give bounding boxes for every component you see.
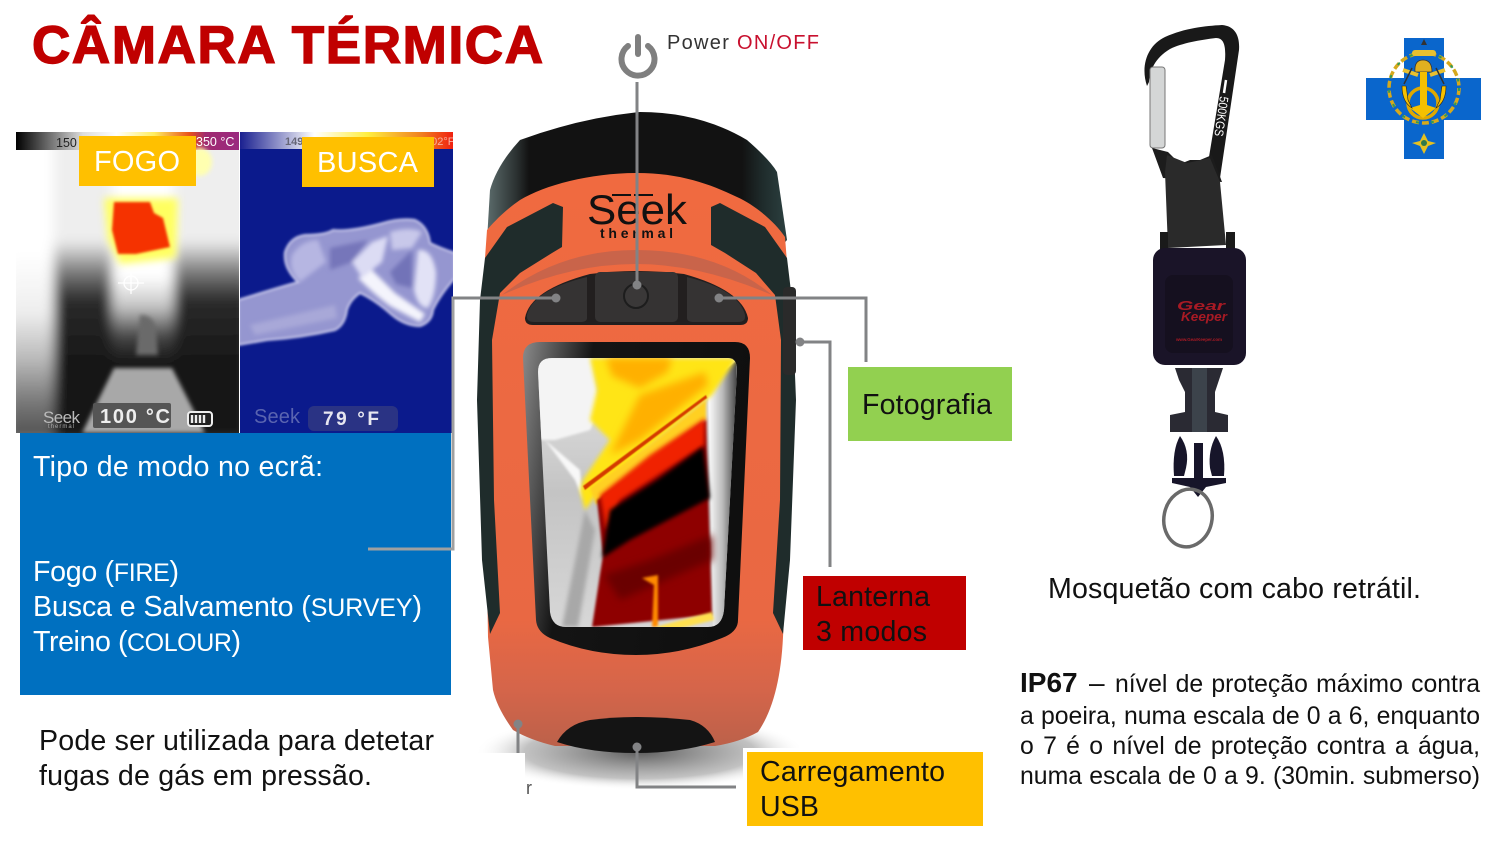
title: CÂMARA TÉRMICA bbox=[32, 14, 543, 75]
label: Carregamento USB: USB bbox=[760, 791, 819, 823]
label: Carregamento USB: Carregamento bbox=[760, 756, 945, 788]
side button bbox=[783, 287, 796, 375]
thermal image: search mode: Seek bbox=[254, 406, 301, 428]
callout line: hidden label bbox=[514, 720, 522, 756]
thermal image: fire mode: 100 °C bbox=[100, 406, 170, 428]
thermal image: search mode: 149°F bbox=[285, 136, 315, 148]
device top bbox=[487, 112, 787, 270]
callout line: power button bbox=[632, 82, 642, 290]
power label: Power ON/OFF bbox=[667, 32, 819, 54]
white mask with cropped label bbox=[463, 753, 532, 813]
thermal image: search mode bbox=[238, 132, 455, 433]
key ring bbox=[1158, 485, 1218, 551]
label: Lanterna 3 modos bbox=[803, 576, 966, 650]
label: Fotografia bbox=[848, 367, 1012, 441]
list: modes: Busca e Salvamento (SURVEY) bbox=[33, 591, 422, 623]
list: modes bbox=[33, 556, 422, 658]
list: modes: Treino (COLOUR) bbox=[33, 626, 241, 658]
label: Lanterna 3 modos: Lanterna bbox=[816, 581, 930, 613]
screen thermal image bbox=[538, 358, 737, 627]
thermal camera device bbox=[475, 112, 805, 790]
thermal image: search mode: 302°F bbox=[425, 136, 455, 148]
panel: screen modes bbox=[20, 433, 451, 695]
strap bbox=[1165, 155, 1226, 248]
emblem: blue cross bbox=[1366, 38, 1481, 159]
carabiner load marking bbox=[1211, 80, 1231, 137]
carabiner hook bbox=[1144, 25, 1239, 178]
label: Carregamento USB bbox=[743, 748, 983, 826]
device grip left bbox=[477, 203, 563, 634]
logo: thermal bbox=[600, 225, 673, 241]
carabiner load marking: 500KGS bbox=[1211, 96, 1231, 137]
callout line: flashlight button bbox=[796, 338, 830, 567]
clip bbox=[1172, 436, 1226, 497]
mode label: FOGO: FOGO bbox=[94, 146, 180, 178]
caption: carabiner: Mosquetão com cabo retrátil. bbox=[1048, 573, 1421, 605]
callout line: photo button bbox=[714, 294, 866, 362]
mode label: BUSCA: BUSCA bbox=[317, 147, 419, 179]
callout line: USB port bbox=[632, 742, 736, 787]
emblem ornament bbox=[1389, 39, 1459, 154]
carabiner with retractable cable: www.GearKeeper.com bbox=[1175, 337, 1222, 342]
text block: IP67: numa escala de 0 a 9. (30min. submerso) bbox=[1020, 763, 1480, 790]
thermal image: fire mode: thermal bbox=[48, 424, 75, 430]
text block: IP67: o 7 é o nível de proteção contra a água, bbox=[1020, 733, 1480, 760]
logo: Seek bbox=[587, 186, 688, 233]
retractor body bbox=[1153, 248, 1246, 365]
heading: modes: Tipo de modo no ecrã: bbox=[33, 451, 323, 483]
screen bezel bbox=[523, 342, 750, 655]
device shadow bbox=[475, 714, 805, 790]
carabiner with retractable cable: Keeper bbox=[1181, 309, 1228, 324]
charging port bbox=[557, 717, 715, 753]
text block: IP67: a poeira, numa escala de 0 a 6, enquanto bbox=[1020, 703, 1480, 730]
label: Fotografia: Fotografia bbox=[862, 389, 992, 421]
thermal image: fire mode bbox=[16, 132, 239, 433]
device grip right bbox=[711, 203, 796, 634]
carabiner gate bbox=[1150, 67, 1165, 148]
label: Lanterna 3 modos: 3 modos bbox=[816, 616, 927, 648]
text block: IP67: – bbox=[1089, 667, 1105, 698]
text block: gas leaks: fugas de gás em pressão. bbox=[39, 760, 372, 792]
power icon bbox=[622, 37, 654, 76]
front buttons bbox=[525, 271, 748, 325]
text block: IP67: IP67 bbox=[1020, 667, 1078, 698]
mode label: FOGO bbox=[79, 136, 196, 186]
thermal image: fire mode: 350 °C bbox=[196, 135, 234, 149]
connector bbox=[1170, 368, 1228, 432]
list: modes: Fogo (FIRE) bbox=[33, 556, 179, 588]
white mask with cropped label: r bbox=[526, 778, 532, 798]
text block: IP67: nível de proteção máximo contra bbox=[1115, 671, 1480, 698]
thermal image: fire mode: 150 bbox=[56, 136, 77, 150]
thermal image: search mode: 79 °F bbox=[323, 409, 379, 430]
text block: gas leaks bbox=[39, 725, 434, 792]
callout line: lateral lead to modes panel bbox=[368, 298, 454, 549]
text block: IP67 bbox=[1020, 667, 1480, 790]
carabiner with retractable cable: Gear bbox=[1177, 298, 1227, 313]
text block: gas leaks: Pode ser utilizada para detetar bbox=[39, 725, 434, 757]
callout line: left button bbox=[453, 294, 560, 302]
thermal image: fire mode: Seek bbox=[43, 408, 80, 427]
device orange body bbox=[484, 173, 790, 746]
mode label: BUSCA bbox=[302, 137, 434, 187]
carabiner with retractable cable bbox=[1144, 25, 1246, 551]
